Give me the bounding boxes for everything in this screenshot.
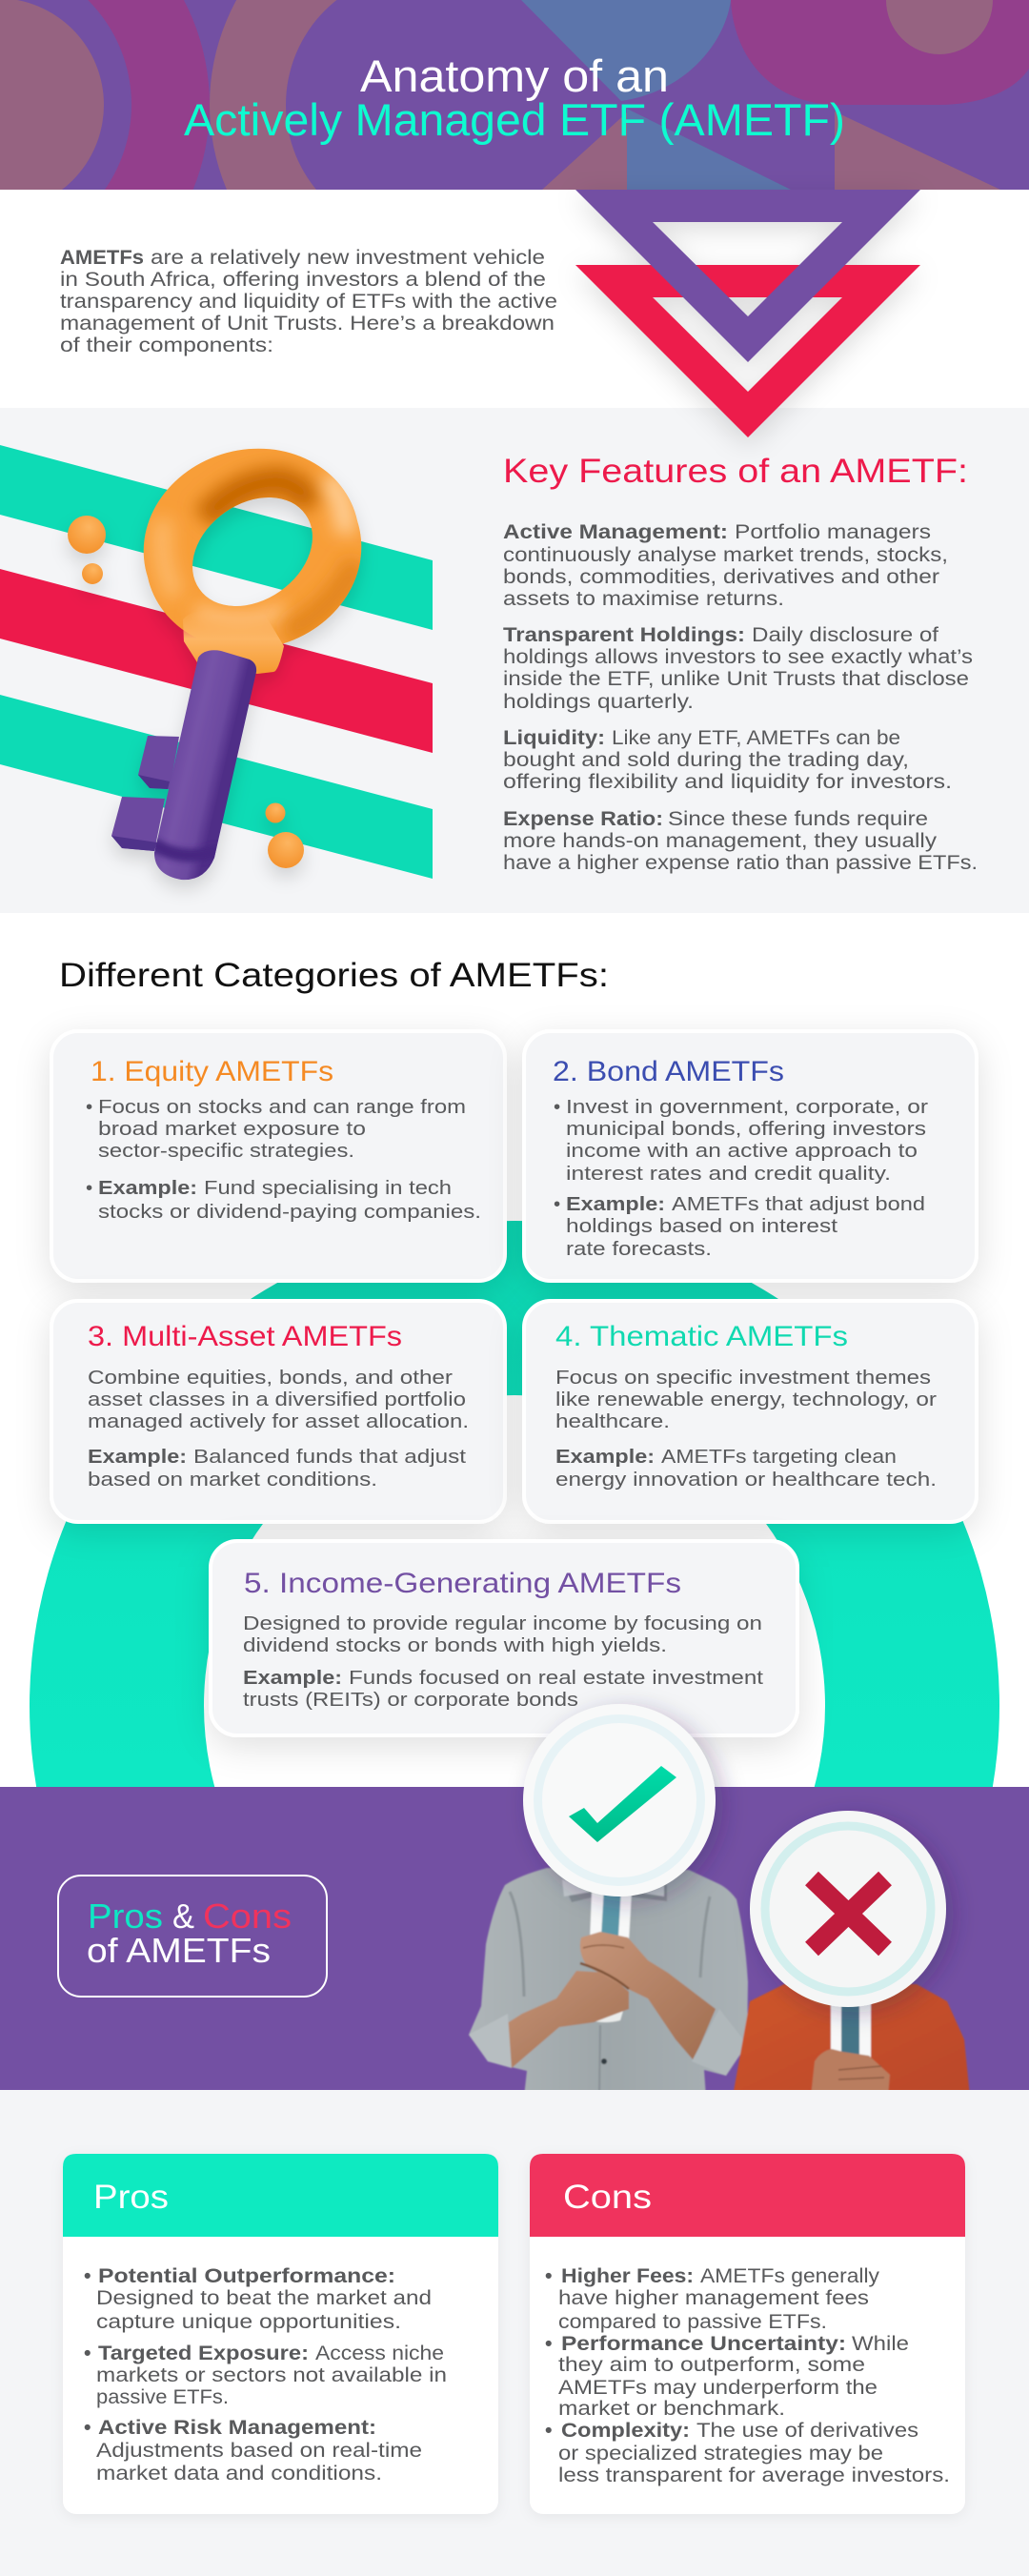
feature: expense ratio: Since these funds require — [668, 807, 928, 830]
illustration: man holding check sign — [469, 1868, 970, 2097]
card 4: thematic: energy innovation or healthcare tech. — [555, 1469, 937, 1491]
card 2: bond: • — [554, 1096, 560, 1118]
cons list: AMETFs generally — [700, 2264, 879, 2287]
man's cuffs — [469, 2014, 512, 2068]
card 3: multi-asset: Balanced funds that adjust — [193, 1446, 466, 1468]
woman's shirt — [733, 1984, 970, 2097]
header banner — [0, 0, 1029, 190]
card 1: equity — [51, 1031, 505, 1281]
feature: transparent holdings: Transparent Holdings: — [503, 623, 745, 646]
handle: cross sign — [829, 2004, 873, 2059]
card 5: income-generating: 5. Income-Generating AMETFs — [244, 1568, 681, 1599]
icon: cross sign — [750, 1811, 946, 2007]
pros and cons label box: Pros — [88, 1897, 163, 1936]
man's forearm: upper — [580, 1932, 716, 2060]
feature: active management: Portfolio managers — [735, 520, 931, 543]
card 1: equity: • — [86, 1096, 92, 1118]
card 4: thematic — [524, 1301, 977, 1522]
teal ring behind cards — [30, 1221, 999, 1787]
card 4: thematic: like renewable energy, technology, or — [555, 1389, 937, 1410]
intro text: transparency and liquidity of ETFs with the active — [60, 290, 557, 313]
feature: liquidity: offering flexibility and liquidity for investors. — [503, 770, 952, 793]
pros list: • — [84, 2342, 91, 2364]
card 1: equity: Example: — [98, 1177, 197, 1199]
card 3: multi-asset: Combine equities, bonds, and other — [88, 1367, 453, 1389]
intro text: of their components: — [60, 334, 273, 356]
card 3: multi-asset — [51, 1301, 505, 1522]
icon: nested triangles — [575, 190, 920, 437]
cons list: The use of derivatives — [696, 2419, 918, 2442]
cons list: compared to passive ETFs. — [558, 2310, 827, 2333]
feature: transparent holdings: Daily disclosure of — [752, 623, 938, 646]
card 3: multi-asset: 3. Multi-Asset AMETFs — [88, 1321, 402, 1352]
pros and cons label box: of AMETFs — [87, 1931, 271, 1970]
card 4: thematic: healthcare. — [555, 1410, 670, 1432]
pros list: Active Risk Management: — [98, 2416, 376, 2439]
title: Anatomy of an — [360, 51, 669, 101]
pros and cons label box — [58, 1876, 327, 1997]
title: Actively Managed ETF (AMETF) — [184, 94, 845, 145]
intro text: AMETFs — [60, 246, 144, 269]
pros list: Adjustments based on real-time — [96, 2439, 422, 2462]
card 5: income-generating: trusts (REITs) or corporate bonds — [243, 1689, 578, 1711]
feature: liquidity — [503, 726, 952, 793]
pros list: Potential Outperformance: — [98, 2264, 395, 2287]
card 1: equity: • — [86, 1177, 92, 1199]
card 2: bond: municipal bonds, offering investors — [566, 1118, 926, 1140]
pros list: Access niche — [315, 2342, 444, 2364]
intro text: management of Unit Trusts. Here’s a breakdown — [60, 312, 555, 335]
key ring — [144, 449, 361, 649]
cons list: While — [852, 2332, 909, 2355]
intro text: are a relatively new investment vehicle — [151, 246, 545, 269]
bottom section background — [0, 2090, 1029, 2576]
feature: liquidity: Like any ETF, AMETFs can be — [612, 726, 900, 749]
card 2: bond: • — [554, 1193, 560, 1215]
heading: categories: Different Categories of AMETFs: — [59, 957, 609, 994]
panel: pros: Pros — [93, 2179, 169, 2216]
pros list: market data and conditions. — [96, 2462, 382, 2485]
card 2: bond — [524, 1031, 977, 1281]
feature: expense ratio: have a higher expense ratio than passive ETFs. — [503, 851, 978, 874]
man's forearm: lower — [496, 1971, 629, 2068]
card 1: equity: stocks or dividend-paying companies. — [98, 1201, 481, 1223]
pros list: Targeted Exposure: — [98, 2342, 309, 2364]
card 2: bond: Example: — [566, 1193, 665, 1215]
card 5: income-generating: Designed to provide regular income by focusing on — [243, 1613, 762, 1634]
feature: transparent holdings: inside the ETF, unlike Unit Trusts that disclose — [503, 667, 969, 690]
card 3: multi-asset: based on market conditions. — [88, 1469, 377, 1491]
feature: active management: bonds, commodities, derivatives and other — [503, 565, 939, 588]
cons list: or specialized strategies may be — [558, 2442, 883, 2464]
pros list: • — [84, 2416, 91, 2439]
intro text — [60, 246, 557, 356]
panel: cons: Cons — [563, 2179, 652, 2216]
handle: check sign — [590, 1892, 632, 1941]
card 1: equity: sector-specific strategies. — [98, 1140, 354, 1162]
card 2: bond: Invest in government, corporate, or — [566, 1096, 928, 1118]
woman's hands — [811, 2048, 891, 2090]
panel: key features background — [0, 408, 1029, 913]
card 1: equity: Focus on stocks and can range from — [98, 1096, 466, 1118]
card 4: thematic: Focus on specific investment themes — [555, 1367, 931, 1389]
icons: orange balls — [68, 516, 304, 868]
card 5: income-generating: dividend stocks or bonds with high yields. — [243, 1634, 667, 1656]
cons list: AMETFs may underperform the — [558, 2376, 878, 2399]
card 3: multi-asset: managed actively for asset allocation. — [88, 1410, 469, 1432]
pros header — [63, 2154, 498, 2237]
feature: expense ratio: Expense Ratio: — [503, 807, 663, 830]
cons list — [545, 2264, 950, 2486]
feature: expense ratio: more hands-on management, they usually — [503, 829, 937, 852]
card 2: bond: rate forecasts. — [566, 1238, 712, 1260]
cons list: have higher management fees — [558, 2286, 869, 2309]
feature: active management — [503, 520, 948, 610]
title — [184, 51, 845, 145]
panel: cons — [530, 2154, 965, 2514]
card 4: thematic: AMETFs targeting clean — [661, 1446, 897, 1468]
feature: active management: Active Management: — [503, 520, 728, 543]
cons list: • — [545, 2264, 553, 2287]
card 3: multi-asset: asset classes in a diversified portfolio — [88, 1389, 466, 1410]
cons header — [530, 2154, 965, 2237]
pros list: • — [84, 2264, 91, 2287]
card 2: bond: interest rates and credit quality. — [566, 1163, 891, 1185]
cons list: less transparent for average investors. — [558, 2464, 950, 2486]
cons list: Complexity: — [561, 2419, 690, 2442]
card 5: income-generating: Example: — [243, 1667, 342, 1689]
pros and cons label box: & — [172, 1897, 194, 1936]
card 2: bond: AMETFs that adjust bond — [672, 1193, 925, 1215]
pros list: passive ETFs. — [96, 2385, 229, 2408]
card 5: income-generating — [211, 1541, 797, 1735]
pros list — [84, 2264, 447, 2485]
panel: pros — [63, 2154, 498, 2514]
feature: liquidity: bought and sold during the trading day, — [503, 748, 909, 771]
card 2: bond: 2. Bond AMETFs — [553, 1056, 784, 1087]
key features text — [503, 453, 978, 874]
feature: transparent holdings: holdings allows investors to see exactly what’s — [503, 645, 973, 668]
panel: pros and cons band — [0, 1787, 1029, 2090]
cons list: • — [545, 2332, 553, 2355]
card 4: thematic: 4. Thematic AMETFs — [555, 1321, 848, 1352]
cons list: Higher Fees: — [561, 2264, 694, 2287]
cons list: • — [545, 2419, 553, 2442]
card 2: bond: holdings based on interest — [566, 1215, 837, 1237]
card 1: equity: 1. Equity AMETFs — [91, 1056, 333, 1087]
card 2: bond: income with an active approach to — [566, 1140, 918, 1162]
decorative stripes behind key — [0, 445, 433, 879]
feature: transparent holdings — [503, 623, 973, 713]
feature: active management: assets to maximise returns. — [503, 587, 784, 610]
pros and cons label box: Cons — [203, 1897, 292, 1936]
icon: check sign — [523, 1704, 716, 1897]
feature: liquidity: Liquidity: — [503, 726, 605, 749]
card 1: equity: Fund specialising in tech — [204, 1177, 452, 1199]
feature: expense ratio — [503, 807, 978, 874]
cons list: market or benchmark. — [558, 2397, 785, 2420]
intro text: in South Africa, offering investors a blend of the — [60, 268, 546, 291]
cons list: they aim to outperform, some — [558, 2353, 865, 2376]
cons list: Performance Uncertainty: — [561, 2332, 846, 2355]
feature: transparent holdings: holdings quarterly. — [503, 690, 694, 713]
pros list: markets or sectors not available in — [96, 2363, 447, 2386]
icon: 3D key — [111, 449, 361, 880]
card 1: equity: broad market exposure to — [98, 1118, 366, 1140]
card 4: thematic: Example: — [555, 1446, 655, 1468]
heading: key features: Key Features of an AMETF: — [503, 453, 968, 490]
pros list: capture unique opportunities. — [96, 2310, 401, 2333]
card 3: multi-asset: Example: — [88, 1446, 187, 1468]
feature: active management: continuously analyse market trends, stocks, — [503, 543, 948, 566]
card 5: income-generating: Funds focused on real estate investment — [349, 1667, 763, 1689]
pros list: Designed to beat the market and — [96, 2286, 432, 2309]
man's shirt — [469, 1868, 748, 2097]
